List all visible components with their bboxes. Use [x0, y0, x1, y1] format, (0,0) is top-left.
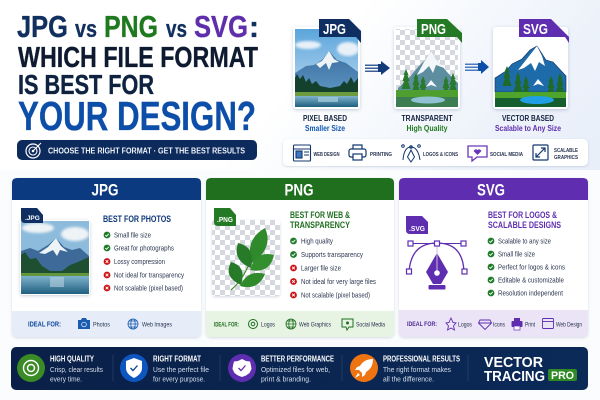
title: : — [249, 11, 259, 44]
benefit: high quality — [17, 354, 104, 384]
logo: Vector Tracing Pro: PRO — [551, 370, 574, 382]
benefit: professional results: PROFESSIONAL RESULTS — [383, 354, 460, 364]
use-case strip: GRAPHICS — [554, 155, 578, 161]
file tag: .PNG — [217, 215, 233, 224]
icon: logos badge — [248, 320, 258, 328]
benefit: high quality: every time. — [50, 376, 82, 384]
panel: PNG — [206, 178, 394, 337]
icon: gem — [478, 320, 492, 330]
file tag: PNG: PNG — [421, 21, 446, 38]
benefit: high quality: HIGH QUALITY — [50, 354, 95, 364]
preview captions: VECTOR BASED — [502, 114, 554, 123]
tagline pill: CHOOSE THE RIGHT FORMAT · GET THE BEST RESULTS — [48, 146, 245, 155]
title: JPG — [17, 10, 68, 44]
feature list: Small file size — [114, 232, 151, 239]
title: vs — [166, 16, 187, 43]
preview captions — [303, 114, 562, 133]
icon: globe — [286, 319, 296, 329]
benefit: better performance — [228, 354, 334, 384]
feature list — [104, 232, 184, 292]
ideal for bar: Logos — [458, 322, 472, 328]
use-case strip: SOCIAL MEDIA — [490, 152, 523, 158]
heading: SCALABLE DESIGNS — [488, 220, 561, 230]
use-case strip: LOGOS & ICONS — [423, 152, 458, 158]
logo: Vector Tracing Pro: VECTOR — [484, 354, 543, 371]
arrow: JPG to PNG — [365, 61, 390, 75]
file tag — [214, 208, 236, 226]
icon: target — [26, 143, 41, 158]
benefit: better performance: print & branding. — [261, 376, 311, 384]
ideal for bar: Social Media — [356, 322, 385, 328]
benefit: right format — [120, 354, 209, 384]
icon: web design — [294, 145, 310, 161]
feature list: Editable & customizable — [498, 277, 564, 284]
file tag: JPG: JPG — [323, 21, 346, 38]
heading: BEST FOR LOGOS & — [488, 210, 557, 220]
ideal for bar: Web Images — [142, 322, 172, 328]
ideal for bar: Web Design — [556, 322, 582, 328]
benefit: right format: for every purpose. — [153, 376, 205, 384]
icon: camera — [78, 318, 90, 329]
icon: chat — [342, 319, 353, 330]
feature list: Not ideal for transparency — [114, 272, 184, 279]
feature list: Great for photographs — [114, 245, 174, 252]
ideal for bar — [399, 310, 588, 337]
feature list: Small file size — [498, 251, 535, 258]
feature list — [290, 238, 376, 299]
icon: printer — [512, 318, 522, 330]
feature list — [488, 238, 565, 297]
header — [206, 178, 394, 200]
ideal for bar: Print — [525, 322, 535, 328]
feature list: Lossy compression — [114, 259, 165, 266]
header: JPG — [92, 180, 118, 200]
icon: scalable graphics — [533, 145, 548, 160]
benefit: professional results: all the difference. — [383, 376, 434, 384]
panel: SVG — [399, 178, 588, 337]
benefit: better performance: Optimized files for web, — [261, 367, 330, 374]
panel: SVG preview card — [493, 19, 569, 109]
benefit: professional results: The right format makes — [383, 367, 452, 374]
benefit: high quality: Crisp, clear results — [50, 367, 104, 374]
ideal for bar: IDEAL FOR: — [28, 322, 61, 328]
title: vs — [75, 16, 97, 43]
ideal for bar: Logos — [261, 322, 275, 328]
ideal for bar — [206, 311, 394, 337]
photo — [20, 220, 90, 295]
header: SVG — [477, 180, 505, 200]
ideal for bar: IDEAL FOR: — [407, 321, 437, 328]
file tag: .JPG — [25, 215, 40, 222]
file tag: .SVG — [409, 224, 425, 233]
use-case strip: SCALABLE — [554, 148, 578, 154]
benefit: professional results — [350, 354, 460, 384]
heading — [290, 210, 350, 230]
icon: globe — [128, 319, 138, 329]
ideal for bar — [12, 311, 201, 337]
arrow: PNG to SVG — [465, 60, 489, 74]
feature list: Not scalable (pixel based) — [114, 285, 183, 292]
feature list: Supports transparency — [301, 252, 363, 259]
logo: Vector Tracing Pro: TRACING — [484, 368, 545, 385]
header: PNG — [284, 180, 314, 200]
preview captions: PIXEL BASED — [303, 114, 347, 123]
title — [17, 10, 259, 139]
heading: BEST FOR PHOTOS — [103, 214, 171, 224]
preview captions: Smaller Size — [305, 124, 346, 133]
icon: browser — [542, 318, 554, 328]
feature list: Resolution independent — [498, 290, 563, 297]
file tag — [21, 208, 43, 223]
icon: logos and icons — [402, 145, 420, 162]
pen tool illustration — [406, 241, 467, 290]
use-case strip: WEB DESIGN — [314, 152, 340, 158]
feature list: Larger file size — [301, 265, 341, 272]
preview captions: High Quality — [406, 124, 448, 133]
heading: BEST FOR WEB & — [290, 210, 350, 220]
icon: social media — [468, 146, 487, 161]
benefits bar — [11, 347, 588, 390]
ideal for bar: Photos — [93, 322, 110, 328]
panel: JPG — [12, 178, 201, 337]
ideal for bar: Web Graphics — [299, 322, 331, 328]
panel: JPG preview card — [293, 19, 361, 109]
use-case strip — [283, 139, 588, 166]
benefit: right format: Use the perfect file — [153, 367, 209, 374]
preview captions: TRANSPARENT — [402, 114, 453, 123]
preview captions: Scalable to Any Size — [495, 124, 562, 133]
header — [12, 178, 201, 200]
file tag — [406, 216, 428, 234]
transparent leaf image — [212, 220, 280, 296]
ideal for bar: IDEAL FOR: — [214, 322, 239, 328]
heading: TRANSPARENCY — [290, 220, 350, 230]
title: YOUR DESIGN? — [18, 93, 256, 139]
feature list: Not scalable (pixel based) — [301, 292, 370, 299]
heading — [488, 210, 561, 230]
feature list: Not ideal for very large files — [301, 279, 376, 286]
benefit: better performance: BETTER PERFORMANCE — [261, 354, 334, 364]
panel: PNG preview card — [394, 19, 462, 109]
feature list: High quality — [301, 238, 333, 245]
tagline pill — [17, 140, 257, 160]
benefit: right format: RIGHT FORMAT — [153, 354, 201, 364]
ideal for bar: Icons — [493, 322, 505, 328]
header — [399, 178, 588, 200]
title: SVG — [194, 10, 248, 44]
title: PNG — [104, 10, 158, 44]
use-case strip: PRINTING — [370, 152, 392, 158]
title: IS BEST FOR — [18, 69, 154, 100]
feature list: Scalable to any size — [498, 238, 551, 245]
icon: printing — [349, 145, 366, 160]
title: WHICH FILE FORMAT — [18, 42, 258, 74]
feature list: Perfect for logos & icons — [498, 264, 565, 271]
file tag: SVG: SVG — [523, 21, 548, 38]
logo: Vector Tracing Pro — [484, 354, 577, 385]
icon: star — [446, 318, 456, 330]
